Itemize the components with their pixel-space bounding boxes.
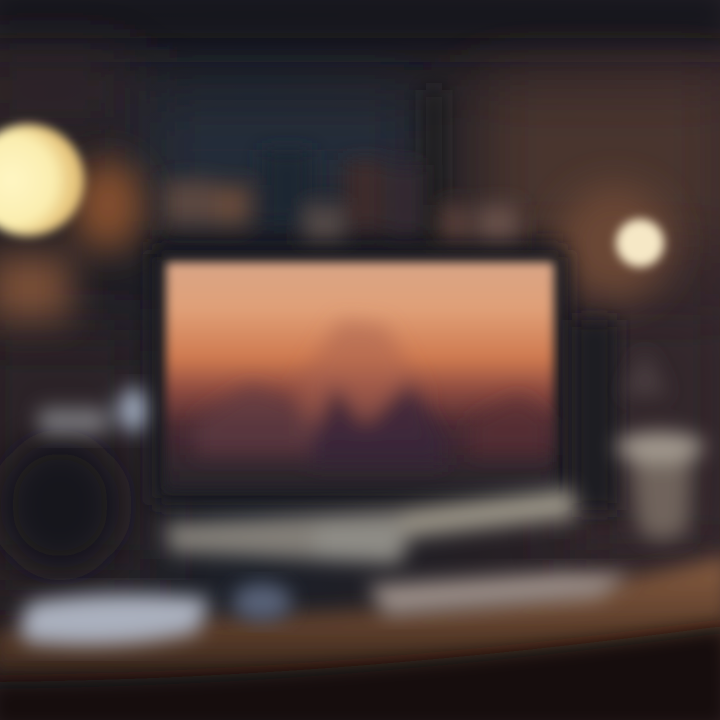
coffee cup (616, 350, 704, 540)
left dark object (0, 440, 120, 570)
monitor screen (166, 262, 554, 490)
top shadow band (0, 0, 720, 50)
shelf with blurred objects (150, 90, 570, 256)
left lamp glow (0, 159, 144, 320)
wall shading: lower left and right (0, 60, 720, 580)
desk front shadow (0, 625, 720, 720)
left pale objects (38, 388, 153, 434)
right dark device (572, 320, 617, 510)
screen mountains (195, 320, 550, 465)
mouse (232, 583, 292, 621)
monitor bezel (152, 250, 568, 505)
papers on desk, right (368, 572, 630, 616)
keyboard (165, 488, 578, 564)
paper on desk, left (21, 594, 210, 645)
right lamp (616, 219, 664, 267)
desk surface (0, 555, 720, 683)
monitor (152, 250, 568, 505)
right lamp halo (557, 185, 673, 301)
left lamp (0, 124, 84, 236)
